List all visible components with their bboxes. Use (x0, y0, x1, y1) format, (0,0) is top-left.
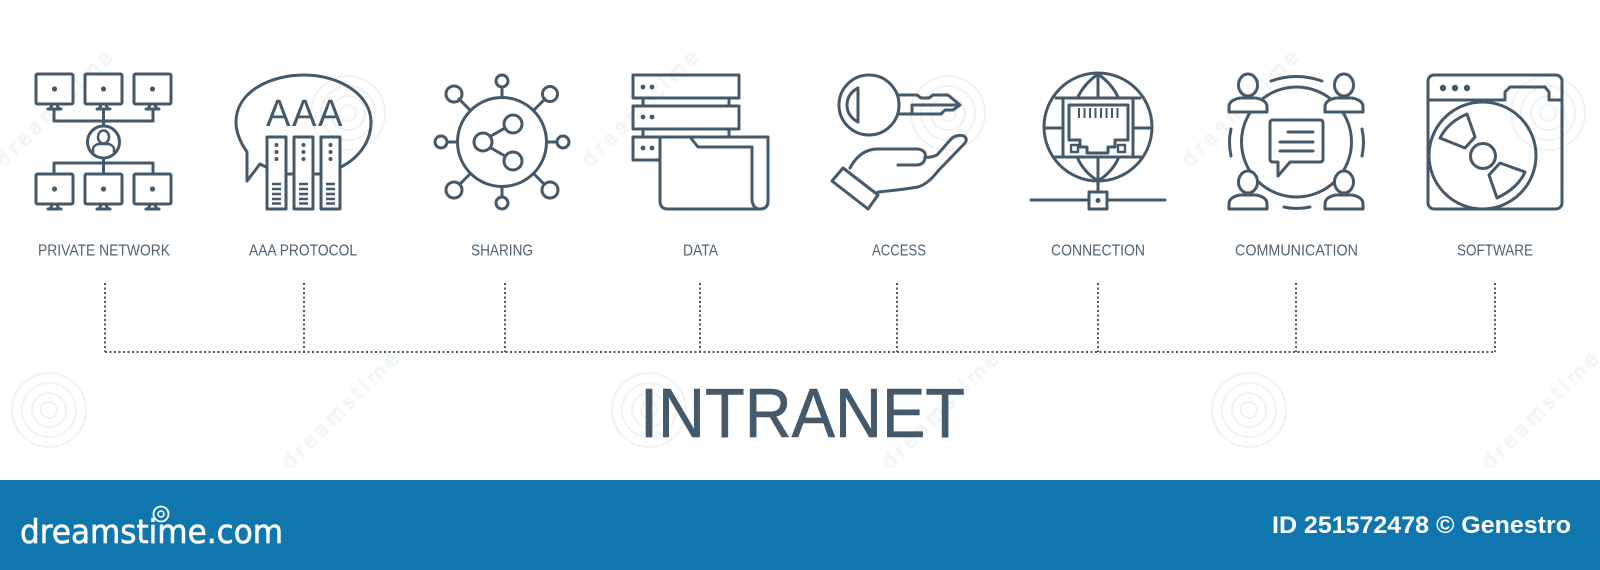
label: sharing: SHARING (471, 242, 533, 260)
icon: software window with disc (1428, 75, 1562, 209)
image id and author: ID 251572478 © Genestro (1272, 512, 1571, 539)
label: access: ACCESS (872, 242, 926, 260)
label: communication: COMMUNICATION (1235, 242, 1358, 260)
icon: connection globe with ethernet port (1031, 73, 1165, 209)
watermark: spirals and diagonal text (0, 45, 1600, 474)
watermark: spirals and diagonal text: dreamstime (1477, 347, 1600, 474)
label: connection: CONNECTION (1051, 242, 1145, 260)
dotted bracket connector (105, 283, 1495, 352)
icon: AAA protocol: A (318, 93, 343, 135)
icon: AAA protocol (236, 75, 371, 209)
watermark: spirals and diagonal text: dreamstime (577, 45, 703, 172)
icon: data (633, 75, 768, 209)
watermark: spirals and diagonal text: dreamstime (1177, 45, 1303, 172)
label: data: DATA (683, 242, 719, 260)
label: private network: PRIVATE NETWORK (38, 242, 171, 260)
icon: access key and hand (832, 75, 966, 209)
footer bar (0, 480, 1600, 570)
dreamstime logo: dreamstime.com (20, 512, 283, 551)
watermark: spirals and diagonal text: dreamstime (277, 347, 403, 474)
icon: private network (36, 74, 171, 209)
icon: communication (1229, 74, 1364, 209)
label: software: SOFTWARE (1457, 242, 1533, 260)
title: INTRANET (640, 374, 965, 452)
label: AAA protocol: AAA PROTOCOL (249, 242, 357, 260)
icon: AAA protocol: A (266, 93, 291, 135)
watermark: spirals and diagonal text: dreamstime (877, 347, 1003, 474)
icon: AAA protocol: A (292, 93, 317, 135)
icon: sharing (435, 75, 569, 209)
